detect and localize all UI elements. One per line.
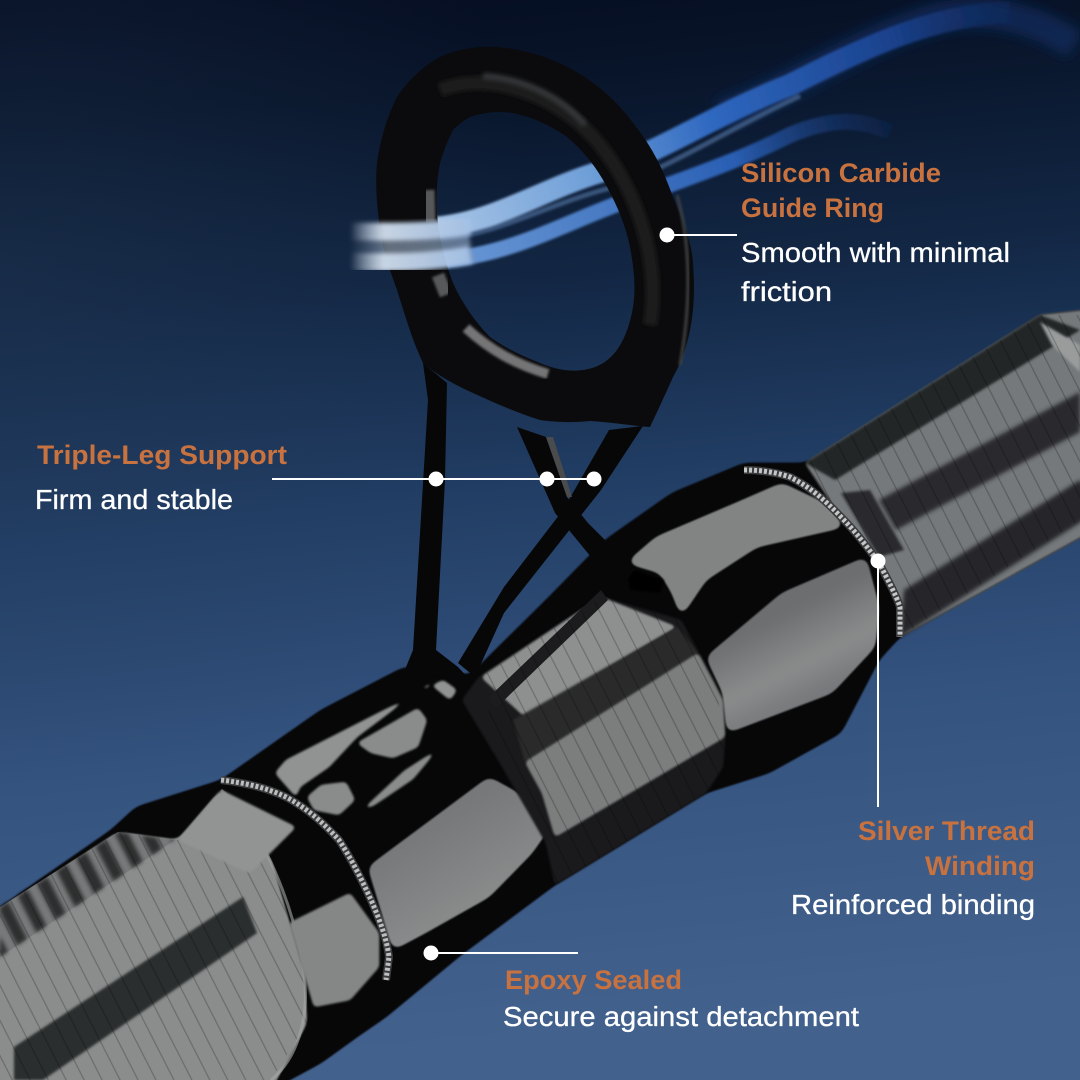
callout: silicon carbide guide ring: Smooth with minimal xyxy=(741,237,1010,268)
callout: silver thread winding: Winding xyxy=(925,851,1035,881)
upper highlight xyxy=(483,76,585,125)
silver thread ring right xyxy=(744,470,900,637)
inner ring band xyxy=(440,83,653,325)
fishing rod xyxy=(0,305,1080,1080)
thread foot xyxy=(626,567,664,593)
right epoxy sheen xyxy=(626,483,879,733)
left inner highlight xyxy=(428,190,446,295)
callout: silicon carbide guide ring xyxy=(660,158,1010,307)
blue motion ribbon xyxy=(430,12,1075,260)
callout: silicon carbide guide ring: friction xyxy=(741,276,832,307)
callout: silver thread winding: Reinforced binding xyxy=(791,889,1035,920)
callout: silicon carbide guide ring: Silicon Carbide xyxy=(741,158,941,188)
guide frame legs xyxy=(404,363,660,680)
left thread winding xyxy=(0,790,307,1080)
callout: triple-leg support xyxy=(35,440,602,515)
callout: silver thread winding xyxy=(791,554,1035,920)
callout: silver thread winding: Silver Thread xyxy=(858,816,1035,846)
middle thread winding xyxy=(462,590,725,885)
centre epoxy sheen xyxy=(368,777,550,950)
left epoxy sheen xyxy=(178,680,457,1007)
callout: triple-leg support: Firm and stable xyxy=(35,484,233,515)
lower inner highlight xyxy=(466,328,548,374)
callout: silicon carbide guide ring: Guide Ring xyxy=(741,193,884,223)
ribbon streak over ring xyxy=(350,226,470,262)
callout: epoxy sealed: Secure against detachment xyxy=(503,1001,859,1032)
right thread winding xyxy=(805,305,1080,637)
guide ring xyxy=(376,47,694,427)
silver thread ring left xyxy=(221,780,389,980)
callout: epoxy sealed xyxy=(424,946,859,1032)
right rim highlight xyxy=(677,195,688,365)
callout: epoxy sealed: Epoxy Sealed xyxy=(505,965,682,995)
callout: triple-leg support: Triple-Leg Support xyxy=(37,440,287,470)
rod silhouette xyxy=(0,305,1080,1080)
